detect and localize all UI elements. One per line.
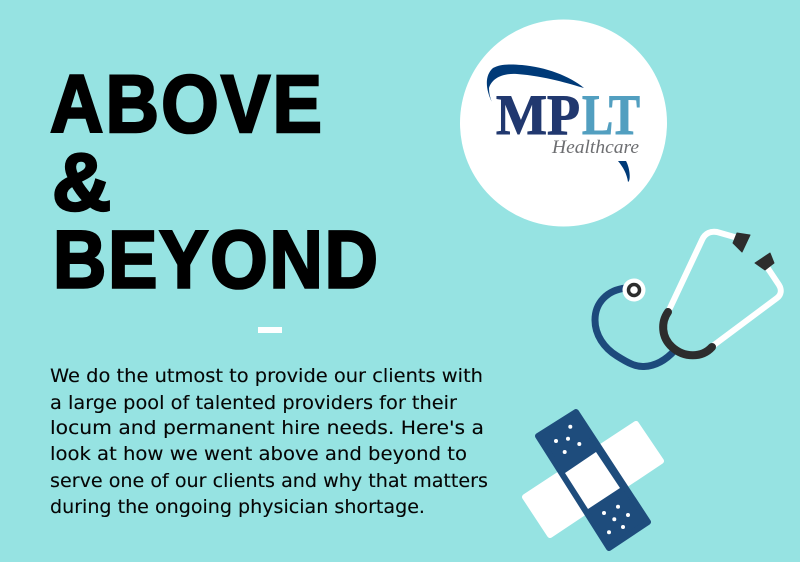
stethoscope blue tube [595,288,675,367]
logo letters MP: MP [496,84,580,147]
bandage white strip [525,424,661,535]
divider dash [258,327,282,333]
body text: during the ongoing physician shortage. [50,496,425,518]
logo badge [460,20,667,226]
body text: serve one of our clients and why that matters [50,470,488,492]
body text: look at how we went above and beyond to [50,443,467,465]
logo wordmark: Healthcare [551,137,639,158]
bandage pad [565,452,620,509]
logo small mark [618,161,630,182]
title: & [52,137,111,228]
bandage blue strip [538,412,648,548]
stethoscope dark yoke [663,312,712,355]
title [50,57,378,305]
stethoscope ear tips [733,233,774,270]
icon: stethoscope [595,232,781,367]
logo swoosh [487,64,584,102]
title: ABOVE [50,57,322,150]
body text: a large pool of talented providers for their [50,392,457,414]
icon: bandage [525,412,661,548]
title: BEYOND [53,213,378,305]
body text: locum and permanent hire needs. Here's a [50,417,484,439]
body text [50,365,488,518]
stethoscope chest piece [622,278,646,302]
bandage holes [554,425,630,534]
logo letters LT: LT [582,84,640,147]
stethoscope white tubes [670,232,781,345]
body text: We do the utmost to provide our clients with [50,365,483,387]
